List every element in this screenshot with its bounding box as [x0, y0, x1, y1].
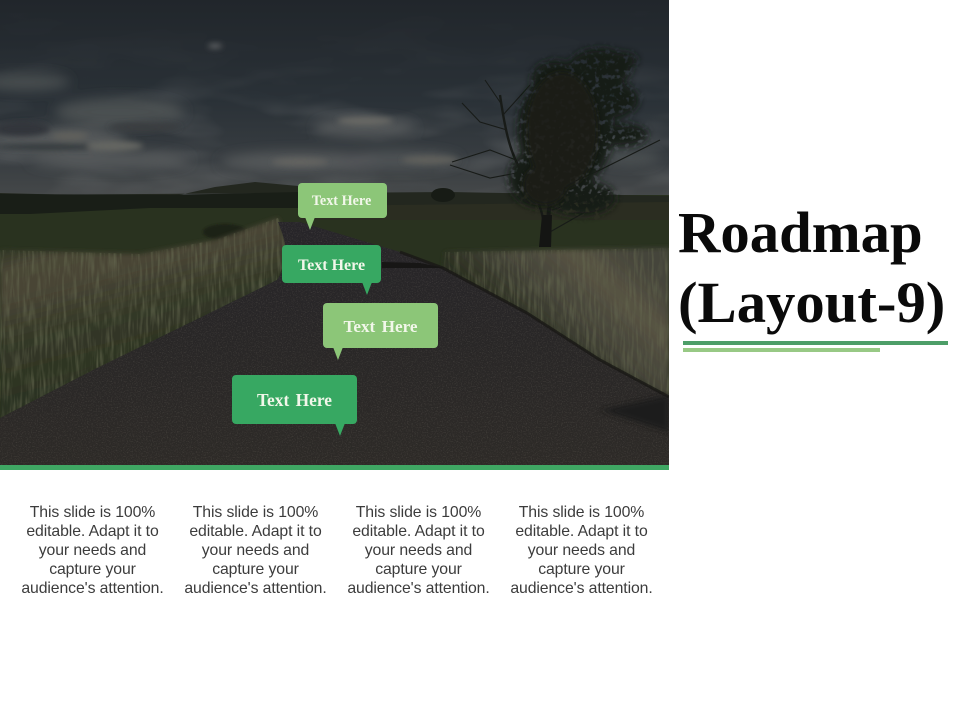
road: [0, 222, 669, 465]
text block 1: [21, 504, 164, 597]
text block 3: [347, 504, 490, 597]
distant hills: [0, 182, 669, 206]
grass texture: [0, 210, 669, 430]
callout: largest green: [232, 375, 357, 436]
panel: dark road landscape photo: [0, 0, 669, 465]
text block 4: your needs and: [528, 542, 635, 559]
text block 2: [184, 504, 327, 597]
road edge shadow: [400, 252, 669, 397]
text block 4: This slide is 100%: [519, 504, 644, 521]
title: Roadmap: [678, 200, 923, 265]
title underline light green: [683, 348, 880, 352]
green base strip under photo: [0, 465, 669, 470]
road shadows: [382, 262, 445, 268]
dark bush left: [203, 224, 247, 240]
tree: [450, 48, 660, 247]
text block 2: editable. Adapt it to: [189, 523, 322, 540]
text block 4: [510, 504, 653, 597]
text block 2: capture your: [212, 561, 299, 578]
text block 3: capture your: [375, 561, 462, 578]
text block 2: audience's attention.: [184, 580, 327, 597]
text block 1: This slide is 100%: [30, 504, 155, 521]
text block 3: This slide is 100%: [356, 504, 481, 521]
ground base: [0, 195, 669, 465]
text block 4: capture your: [538, 561, 625, 578]
callout: large light green: [323, 303, 438, 360]
clouds: [0, 40, 669, 194]
sky: [0, 0, 669, 200]
road grain: [0, 220, 669, 465]
text block 2: This slide is 100%: [193, 504, 318, 521]
text block 1: editable. Adapt it to: [26, 523, 159, 540]
callout: medium green: [282, 245, 381, 295]
text block 1: audience's attention.: [21, 580, 164, 597]
text block 4: editable. Adapt it to: [515, 523, 648, 540]
tree line: [0, 192, 300, 214]
callout: medium green: Text Here: [298, 257, 365, 274]
callout: small light green: Text Here: [312, 193, 371, 209]
text block 3: editable. Adapt it to: [352, 523, 485, 540]
text block 3: your needs and: [365, 542, 472, 559]
text block 2: your needs and: [202, 542, 309, 559]
title: [678, 200, 945, 335]
grass left and right: [0, 218, 669, 418]
small bush on horizon: [431, 188, 455, 202]
text block 3: audience's attention.: [347, 580, 490, 597]
text block 4: audience's attention.: [510, 580, 653, 597]
title underline dark green: [683, 341, 948, 345]
callout: largest green: Text Here: [257, 390, 332, 410]
field right upper band: [300, 202, 669, 220]
title: (Layout-9): [678, 270, 945, 335]
text block 1: your needs and: [39, 542, 146, 559]
text block 1: capture your: [49, 561, 136, 578]
callout: small light green: [298, 183, 387, 230]
callout: large light green: Text Here: [343, 317, 418, 336]
